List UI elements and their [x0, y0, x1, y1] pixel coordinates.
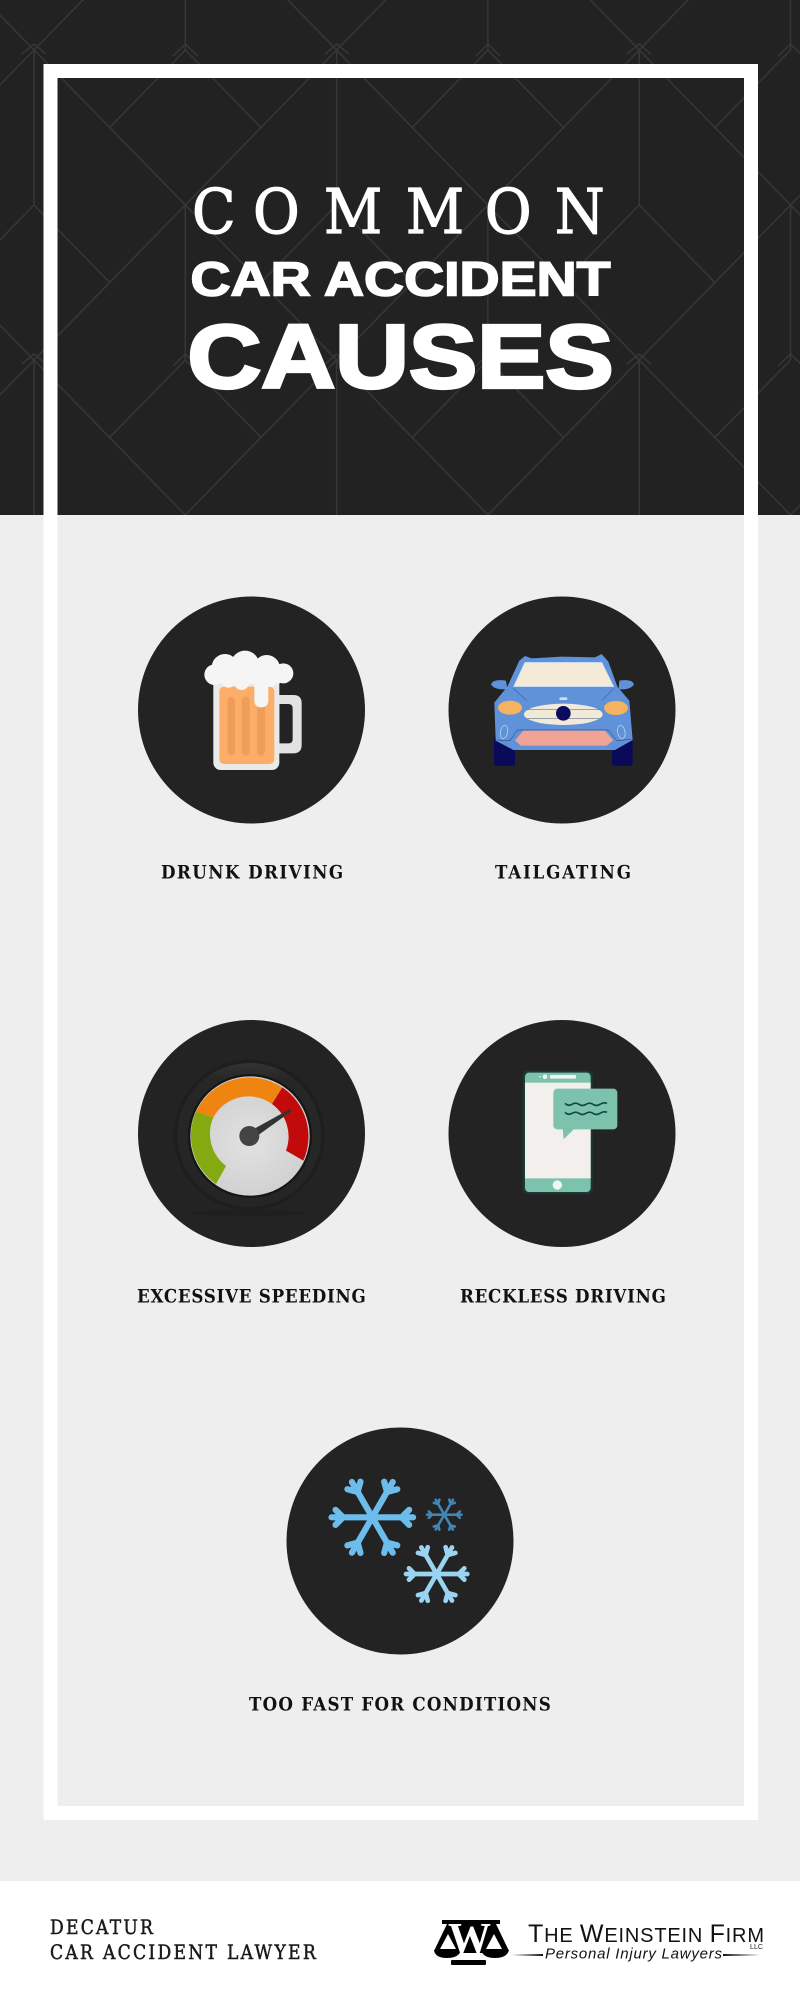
title	[188, 177, 614, 408]
logo icon: scales with W	[434, 1914, 509, 1965]
icon: beer mug	[204, 651, 302, 770]
title line: common: COMMON	[192, 177, 605, 249]
label: TOO FAST FOR CONDITIONS	[249, 1694, 551, 1716]
circle	[448, 596, 676, 824]
label: RECKLESS DRIVING	[460, 1286, 666, 1308]
title line: causes: CAUSES	[188, 308, 614, 408]
item: excessive speeding	[137, 1020, 366, 1308]
circle	[286, 1428, 514, 1654]
label: EXCESSIVE SPEEDING	[137, 1286, 366, 1308]
footer location text	[50, 1917, 317, 1964]
item: reckless driving	[448, 1020, 676, 1308]
icon: blue car	[491, 654, 634, 766]
footer line 2: CAR ACCIDENT LAWYER	[50, 1942, 317, 1964]
label: DRUNK DRIVING	[161, 862, 343, 884]
item: too fast for conditions	[249, 1428, 551, 1716]
logo name: THE WEINSTEIN FIRM	[528, 1920, 764, 1948]
circle	[138, 1020, 365, 1247]
label: TAILGATING	[495, 862, 631, 884]
logo tagline rules	[512, 1954, 760, 1956]
frame border	[44, 64, 758, 1820]
logo llc: LLC	[750, 1944, 763, 1951]
logo icon: scales with W: W	[448, 1914, 491, 1963]
logo tagline: Personal Injury Lawyers	[545, 1946, 722, 1962]
icon: speedometer	[174, 1060, 325, 1216]
circle	[448, 1020, 676, 1247]
footer line 1: DECATUR	[50, 1917, 154, 1939]
light content background	[0, 515, 800, 1881]
item: drunk driving	[138, 596, 365, 884]
circle	[138, 596, 365, 824]
item: tailgating	[448, 596, 676, 884]
logo: the weinstein firm	[434, 1914, 764, 1965]
white footer band	[0, 1881, 800, 2000]
header dark band	[0, 0, 800, 515]
title line: car accident: CAR ACCIDENT	[190, 253, 610, 306]
icon: phone with message	[523, 1071, 617, 1194]
icon: snowflakes	[332, 1478, 467, 1603]
